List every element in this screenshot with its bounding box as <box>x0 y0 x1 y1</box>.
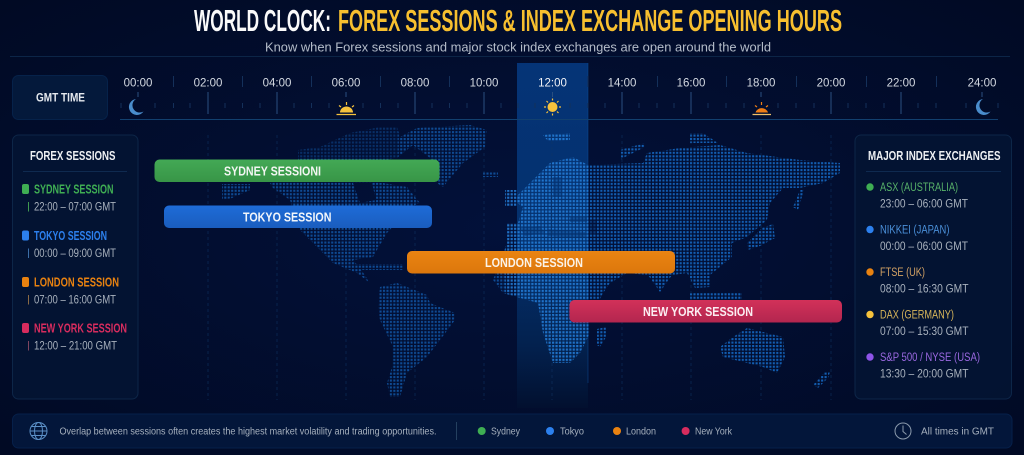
icon: sunrise 06:00 <box>336 102 356 114</box>
legend: sydney: Sydney <box>491 426 520 438</box>
highlighted noon band <box>517 63 588 408</box>
hour labels: 12:00 <box>538 78 567 90</box>
asx row <box>866 182 968 210</box>
icon: globe <box>30 422 47 440</box>
asx row: 23:00 – 06:00 GMT <box>880 198 968 210</box>
dotted world map <box>222 125 840 397</box>
hour labels: 18:00 <box>747 78 775 90</box>
s&p row: 13:30 – 20:00 GMT <box>880 368 968 380</box>
london row: LONDON SESSION <box>34 276 119 290</box>
gmt time box: GMT TIME <box>36 92 85 104</box>
hour labels <box>124 78 996 90</box>
panel heading: FOREX SESSIONS <box>30 149 116 163</box>
panel: forex sessions <box>12 135 138 399</box>
dax row <box>866 310 968 338</box>
london row <box>22 276 119 306</box>
hour labels: 16:00 <box>677 78 705 90</box>
tokyo row: 00:00 – 09:00 GMT <box>34 248 116 260</box>
tokyo row: TOKYO SESSION <box>34 229 107 243</box>
legend: london <box>613 426 656 438</box>
gmt time box <box>12 76 108 120</box>
ftse row <box>866 267 968 296</box>
ftse row: 08:00 – 16:30 GMT <box>880 284 968 296</box>
nikkei row <box>866 224 968 253</box>
new york row <box>22 322 127 352</box>
sydney row: SYDNEY SESSION <box>34 182 114 196</box>
bar: tokyo session: TOKYO SESSION <box>243 210 332 224</box>
hour labels: 08:00 <box>401 78 429 90</box>
legend: sydney <box>478 426 520 438</box>
london row: 07:00 – 16:00 GMT <box>34 294 116 306</box>
all times note: All times in GMT <box>921 426 995 438</box>
ftse row: FTSE (UK) <box>880 267 925 279</box>
icon: moon 00:00 <box>129 99 144 115</box>
s&p row <box>866 352 980 380</box>
dax row: DAX (GERMANY) <box>880 310 954 322</box>
hour labels: 24:00 <box>968 78 996 90</box>
icon: sunset 18:00 <box>752 102 771 114</box>
bar: new york session <box>570 300 842 322</box>
new york row: 12:00 – 21:00 GMT <box>34 340 117 352</box>
icon: clock <box>895 423 911 439</box>
map vertical grid lines <box>208 135 831 400</box>
sydney row <box>22 182 116 214</box>
legend: tokyo: Tokyo <box>560 426 585 438</box>
header divider <box>10 56 1010 57</box>
hour labels: 00:00 <box>124 78 152 90</box>
hour labels: 14:00 <box>608 78 636 90</box>
hour labels: 02:00 <box>194 78 222 90</box>
bar: london session: LONDON SESSION <box>485 256 583 270</box>
title: WORLD CLOCK: <box>194 3 331 38</box>
bar: sydney session <box>154 160 440 182</box>
nikkei row: NIKKEI (JAPAN) <box>880 224 950 236</box>
subtitle: Know when Forex sessions and major stock index exchanges are open around the world <box>265 40 771 54</box>
legend: london: London <box>626 426 656 438</box>
bar: tokyo session <box>164 206 432 228</box>
nikkei row: 00:00 – 06:00 GMT <box>880 241 968 253</box>
footer bar <box>12 414 1012 448</box>
legend: new york: New York <box>695 426 732 438</box>
footer note: Overlap between sessions often creates the highest market volatility and trading opportunities. <box>60 426 436 438</box>
bar: sydney session: SYDNEY SESSIONI <box>224 164 321 178</box>
dax row: 07:00 – 15:30 GMT <box>880 326 968 338</box>
hour labels: 10:00 <box>470 78 498 90</box>
s&p row: S&P 500 / NYSE (USA) <box>880 352 980 364</box>
hour labels: 22:00 <box>887 78 915 90</box>
icon: moon 24:00 <box>976 99 990 115</box>
timeline <box>120 76 998 120</box>
title <box>194 3 842 38</box>
legend: new york <box>682 426 732 438</box>
icon: sun 12:00 <box>544 98 561 116</box>
bar: new york session: NEW YORK SESSION <box>643 305 753 319</box>
hour labels: 04:00 <box>263 78 291 90</box>
panel: major index exchanges <box>855 135 1012 399</box>
tokyo row <box>22 229 116 260</box>
bar: london session <box>407 251 675 274</box>
new york row: NEW YORK SESSION <box>34 322 127 336</box>
sydney row: 22:00 – 07:00 GMT <box>34 202 116 214</box>
hour labels: 20:00 <box>817 78 845 90</box>
legend: tokyo <box>546 426 585 438</box>
asx row: ASX (AUSTRALIA) <box>880 182 958 194</box>
tick marks <box>121 76 998 114</box>
hour labels: 06:00 <box>332 78 360 90</box>
